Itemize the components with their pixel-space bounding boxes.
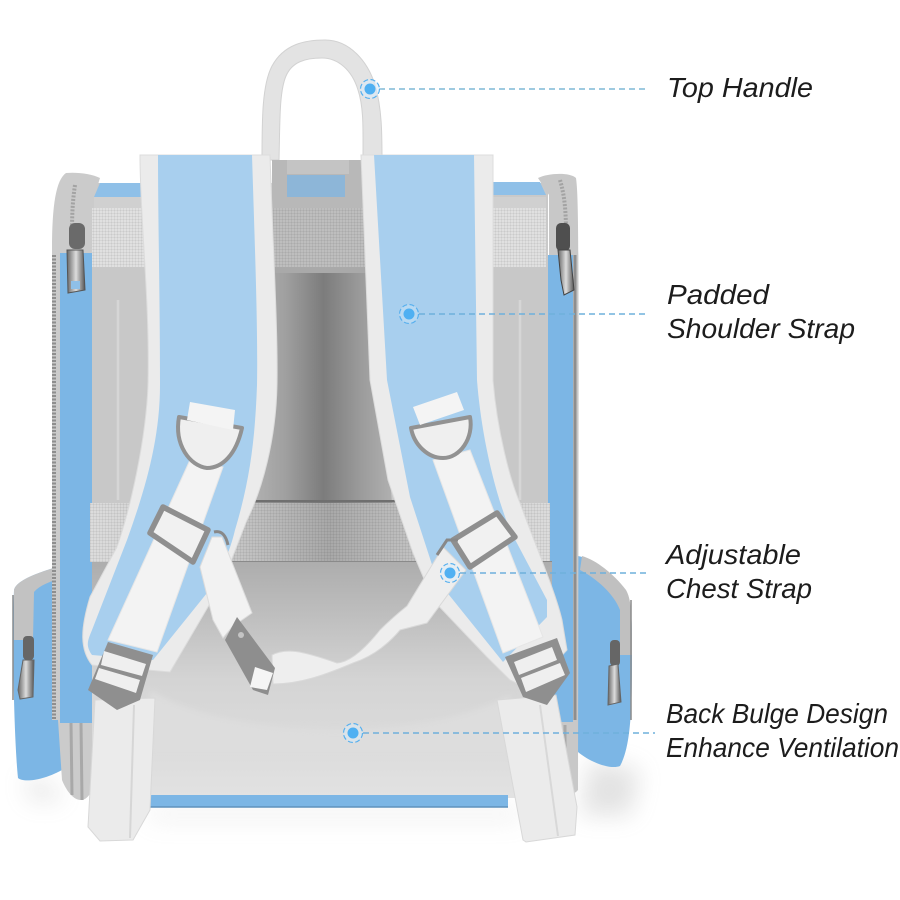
top blue trim xyxy=(94,182,546,209)
right D ring tab xyxy=(413,392,464,425)
left lower loose strap xyxy=(88,698,155,841)
panel: right pocket xyxy=(578,556,632,767)
centre dark vent area xyxy=(255,267,392,503)
panel: main bag body xyxy=(52,160,579,807)
left zipper side xyxy=(52,173,100,800)
icon: left D ring xyxy=(178,417,242,468)
callout: padded shoulder strap: Shoulder Strap xyxy=(667,313,855,344)
icon: left upper zipper pull xyxy=(67,223,85,293)
callout: padded shoulder strap xyxy=(400,279,855,344)
chest strap xyxy=(200,532,466,695)
icon: left pocket zipper pull xyxy=(18,636,34,699)
panel: left pocket xyxy=(13,566,62,780)
bottom blue trim xyxy=(148,795,508,807)
top mesh band xyxy=(92,208,546,267)
icon: chest buckle xyxy=(225,617,275,695)
callout: back bulge design xyxy=(344,698,899,763)
callout: back bulge design: Back Bulge Design xyxy=(666,698,888,729)
left webbing xyxy=(108,460,223,652)
right lower loose strap xyxy=(497,695,577,842)
lower mesh band xyxy=(90,500,552,563)
icon: left lower buckle xyxy=(88,642,153,710)
icon: right pocket zipper pull xyxy=(608,640,621,705)
left shoulder strap xyxy=(83,155,277,841)
lower back bulge xyxy=(92,562,552,798)
top centre pocket window xyxy=(272,160,364,210)
callout: top handle xyxy=(360,72,813,103)
left D ring tab xyxy=(187,402,235,430)
right webbing xyxy=(433,450,543,653)
callout: adjustable chest strap: Adjustable xyxy=(664,539,801,570)
back panel xyxy=(92,267,548,507)
callout: top handle: Top Handle xyxy=(667,72,813,103)
icon: top handle xyxy=(262,40,382,160)
icon: right lower buckle xyxy=(505,638,570,705)
callout: padded shoulder strap: Padded xyxy=(667,279,770,310)
icon: left slider xyxy=(150,507,208,562)
icon: right D ring xyxy=(411,417,471,458)
callout: adjustable chest strap xyxy=(440,539,812,604)
ground shadow xyxy=(25,760,640,820)
callout: adjustable chest strap: Chest Strap xyxy=(666,573,812,604)
right zipper side xyxy=(538,174,579,794)
icon: right slider xyxy=(453,513,515,567)
icon: right upper zipper pull xyxy=(556,223,574,295)
right shoulder strap xyxy=(361,155,577,842)
